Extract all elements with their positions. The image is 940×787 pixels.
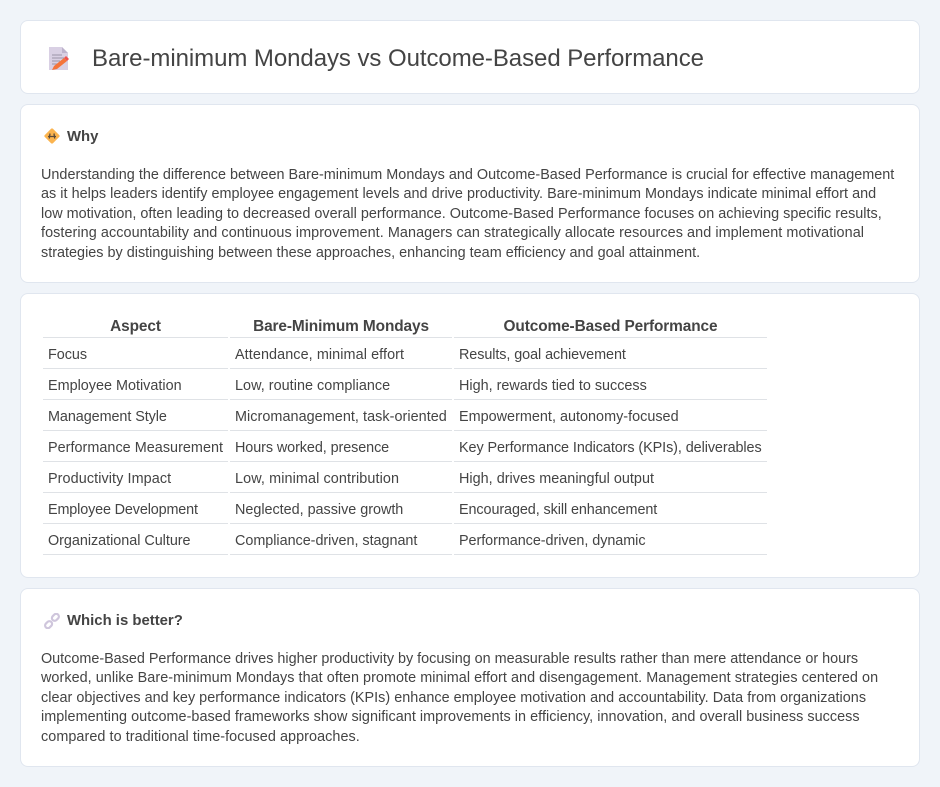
heading: why: Why bbox=[67, 129, 98, 145]
icon: diamond sign bbox=[44, 128, 60, 144]
row: productivity impact bbox=[48, 471, 654, 487]
row: organizational culture: Organizational Culture bbox=[48, 533, 191, 549]
row: productivity impact: Low, minimal contribution bbox=[235, 471, 399, 487]
row: performance measurement bbox=[48, 440, 762, 456]
panel: title header bbox=[20, 20, 920, 94]
row: productivity impact: Productivity Impact bbox=[48, 471, 171, 487]
which is better paragraph: worked, unlike Bare-minimum Mondays that often promote minimal effort and disengagement. Management strategies centered on bbox=[41, 670, 878, 686]
row: focus: Results, goal achievement bbox=[459, 347, 626, 363]
row: management style: Management Style bbox=[48, 409, 167, 425]
which is better paragraph: clear objectives and key performance indicators (KPIs) enhance employee motivation and accountability. Data from organizations bbox=[41, 690, 866, 706]
row: management style: Empowerment, autonomy-focused bbox=[459, 409, 679, 425]
row: focus: Attendance, minimal effort bbox=[235, 347, 404, 363]
row: employee motivation bbox=[48, 378, 647, 394]
row: performance measurement: Hours worked, presence bbox=[235, 440, 389, 456]
panel: comparison table bbox=[20, 293, 920, 578]
panel: why bbox=[20, 104, 920, 283]
row: employee development bbox=[48, 502, 658, 518]
row: focus bbox=[48, 347, 626, 363]
row: employee development: Employee Development bbox=[48, 502, 198, 518]
why paragraph: low motivation, often leading to decreased overall performance. Outcome-Based Performance focuses on achieving specific results, bbox=[41, 206, 882, 222]
which is better paragraph bbox=[41, 651, 878, 745]
row: focus: Focus bbox=[48, 347, 87, 363]
row: organizational culture: Performance-driven, dynamic bbox=[459, 533, 645, 549]
table header row: Aspect bbox=[110, 318, 161, 335]
table header row: Outcome-Based Performance bbox=[504, 318, 717, 335]
icon: chain link bbox=[44, 613, 60, 629]
why paragraph bbox=[41, 167, 894, 261]
why paragraph: strategies by distinguishing between these approaches, enhancing team efficiency and goal attainment. bbox=[41, 245, 700, 261]
row: employee development: Encouraged, skill enhancement bbox=[459, 502, 657, 518]
why paragraph: Understanding the difference between Bare-minimum Mondays and Outcome-Based Performance is crucial for effective management bbox=[41, 167, 894, 183]
panel: which is better bbox=[20, 588, 920, 767]
row: organizational culture bbox=[48, 533, 646, 549]
row: performance measurement: Performance Measurement bbox=[48, 440, 223, 456]
table header row bbox=[110, 318, 717, 335]
which is better paragraph: compared to traditional time-focused approaches. bbox=[41, 729, 360, 745]
row: management style bbox=[48, 409, 679, 425]
title: Bare-minimum Mondays vs Outcome-Based Performance bbox=[92, 45, 704, 72]
row: productivity impact: High, drives meaningful output bbox=[459, 471, 654, 487]
row: performance measurement: Key Performance Indicators (KPIs), deliverables bbox=[459, 440, 762, 456]
which is better paragraph: implementing outcome-based frameworks show significant improvements in efficiency, innovation, and overall business success bbox=[41, 709, 860, 725]
row: organizational culture: Compliance-driven, stagnant bbox=[235, 533, 417, 549]
table header row: Bare-Minimum Mondays bbox=[253, 318, 429, 335]
row: management style: Micromanagement, task-oriented bbox=[235, 409, 447, 425]
row: employee development: Neglected, passive growth bbox=[235, 502, 403, 518]
icon: document with pencil bbox=[49, 47, 69, 70]
heading: which is better: Which is better? bbox=[67, 613, 183, 629]
why paragraph: as it helps leaders identify employee engagement levels and drive productivity. Bare-minimum Mondays indicate minimal effort and bbox=[41, 186, 876, 202]
why paragraph: fostering accountability and continuous improvement. Managers can strategically allocate resources and implement motivational bbox=[41, 225, 864, 241]
row: employee motivation: Employee Motivation bbox=[48, 378, 182, 394]
which is better paragraph: Outcome-Based Performance drives higher productivity by focusing on measurable results rather than mere attendance or hours bbox=[41, 651, 858, 667]
row: employee motivation: High, rewards tied to success bbox=[459, 378, 647, 394]
row: employee motivation: Low, routine compliance bbox=[235, 378, 390, 394]
